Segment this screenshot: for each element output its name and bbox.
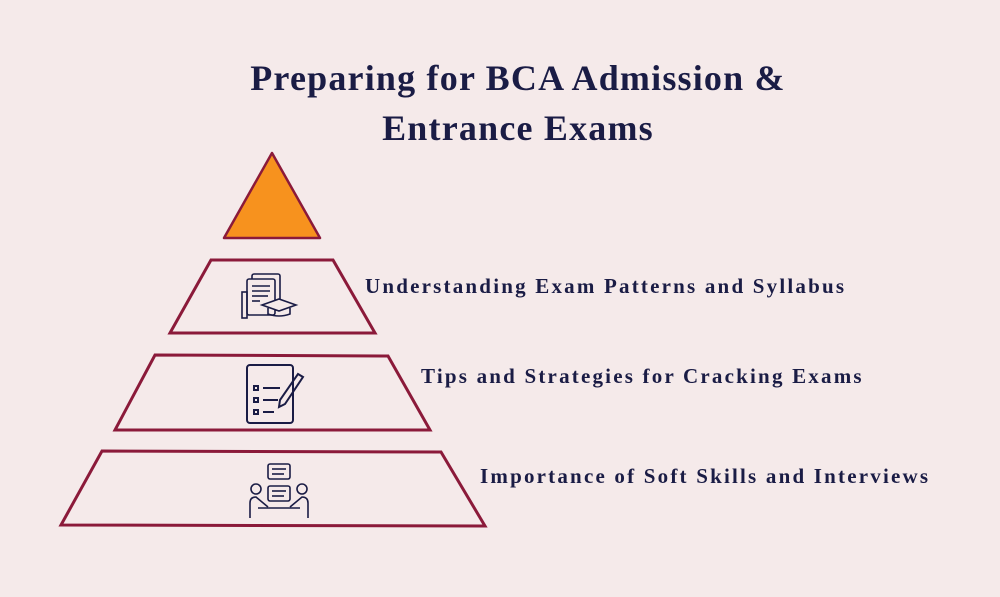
title: Preparing for BCA Admission & [250,58,786,98]
title [250,58,786,148]
icon: checklist with pencil [247,365,303,423]
title: Entrance Exams [382,108,654,148]
icon: documents with grad cap [242,274,296,318]
label 1: Understanding Exam Patterns and Syllabus [365,274,846,298]
pyramid apex [224,153,320,238]
tier 2 [115,355,430,430]
icon: interview people [250,464,308,518]
tier 1 [170,260,375,333]
label 3: Importance of Soft Skills and Interviews [480,464,930,488]
tier 3 [61,451,485,526]
label 2: Tips and Strategies for Cracking Exams [421,364,864,388]
